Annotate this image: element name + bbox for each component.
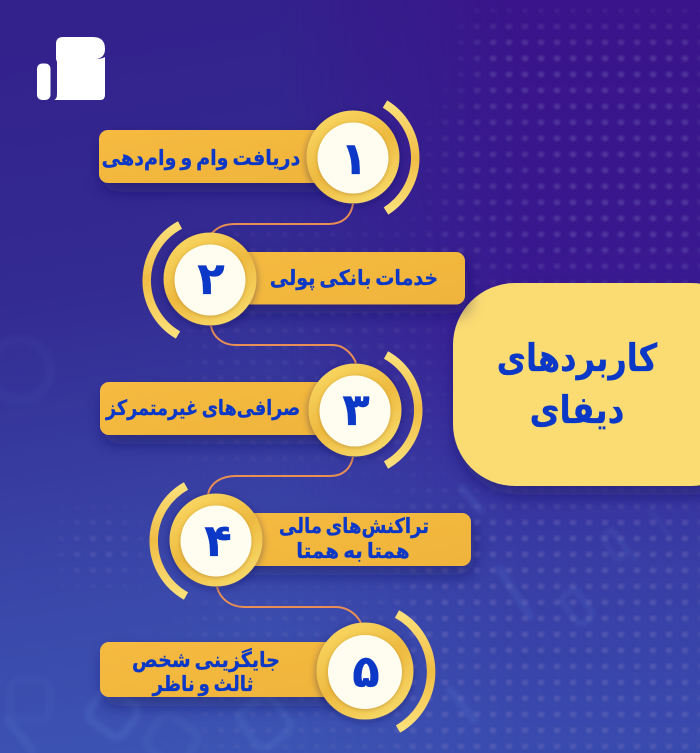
label text 4 — [279, 514, 429, 563]
item 5 — [100, 614, 431, 729]
label text 5 — [132, 647, 280, 696]
number badge 1 — [306, 110, 400, 204]
label pill 5 — [100, 642, 350, 697]
number badge 5: ۵ — [352, 645, 380, 698]
title text line 2: دیفای — [530, 389, 624, 433]
label pill 3 — [100, 382, 340, 435]
number badge 2 — [164, 232, 256, 326]
title text: کاربردهای — [497, 336, 658, 381]
label text 3: صرافی‌های غیرمتمرکز — [105, 396, 300, 420]
number badge 5 — [316, 622, 414, 720]
label text 5: جایگزینی شخص — [132, 647, 280, 672]
number badge 3 — [308, 364, 402, 456]
outer arc 4 — [154, 486, 186, 596]
outer arc 5 — [397, 614, 431, 729]
number badge 4 — [170, 494, 262, 586]
label text 2: خدمات بانکی پولی — [270, 265, 438, 291]
item 3 — [100, 355, 418, 465]
item 4 — [154, 486, 471, 596]
number badge 3: ۳ — [342, 383, 370, 436]
label text 4: همتا به همتا — [296, 539, 410, 563]
outer arc 2 — [147, 225, 180, 335]
logo — [37, 37, 105, 100]
number badge 2: ۲ — [197, 252, 225, 305]
connector lines — [208, 204, 361, 623]
label text 1: دریافت وام و وام‌دهی — [102, 145, 300, 170]
item 2 — [147, 225, 465, 335]
label text 4: تراکنش‌های مالی — [279, 514, 429, 538]
label pill 2 — [215, 252, 465, 304]
number badge 1: ۱ — [340, 132, 368, 185]
number badge 4: ۴ — [204, 514, 232, 567]
outer arc 1 — [385, 104, 415, 211]
item 1 — [99, 104, 415, 211]
label text 5: ثالث و ناظر — [152, 672, 254, 696]
title panel — [453, 283, 700, 486]
label pill 4 — [220, 513, 471, 566]
label pill 1 — [99, 130, 339, 183]
outer arc 3 — [386, 355, 418, 465]
